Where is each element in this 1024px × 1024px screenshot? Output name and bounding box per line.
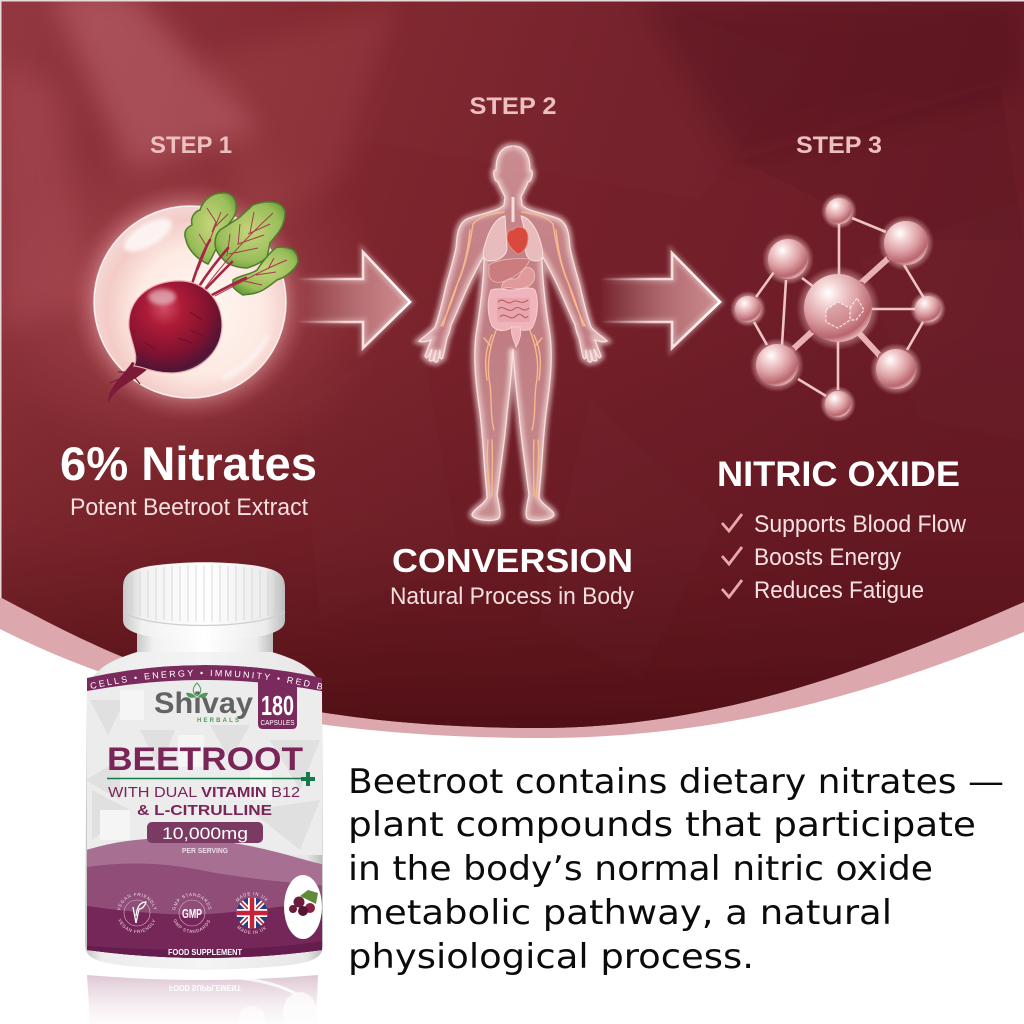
dosage pill: 10,000mg (162, 824, 248, 843)
description paragraph (348, 762, 1004, 977)
benefit: supports blood flow: Supports Blood Flow (754, 511, 967, 538)
benefits checklist (722, 511, 967, 604)
stems (192, 240, 246, 297)
label wave: mid (87, 864, 322, 958)
text: 6% Nitrates heading: 6% Nitrates (60, 437, 317, 490)
leaf: front right (215, 247, 298, 296)
bottle reflection (87, 975, 318, 1024)
bottle neck (137, 628, 273, 660)
bottle reflection: FOOD SUPPLEMENT (169, 983, 241, 992)
liver (489, 259, 530, 282)
benefit: boosts energy: Boosts Energy (754, 544, 901, 571)
stomach (502, 268, 535, 290)
leaf: middle (205, 202, 285, 288)
step 1 label: STEP 1 (150, 132, 232, 159)
text: NITRIC OXIDE heading: NITRIC OXIDE (717, 455, 960, 494)
GMP badge: GMP STANDARDS (172, 892, 212, 910)
icon: nitric oxide molecule (730, 193, 946, 422)
band text: D CELLS • ENERGY • IMMUNITY • RED BL (90, 670, 322, 690)
ingredients: WITH DUAL VITAMIN B12 (108, 784, 300, 801)
arrow: step 2 to step 3 (600, 253, 720, 348)
description paragraph: in the body’s normal nitric oxide (348, 849, 933, 889)
label background pattern (82, 680, 327, 855)
bottle cap (123, 562, 285, 640)
UK badge: MADE IN UK (237, 926, 266, 934)
vegan badge: VEGAN FRIENDLY (118, 918, 156, 934)
windpipe (512, 197, 514, 222)
icon: beetroot in bubble (70, 182, 310, 422)
beet root (108, 281, 222, 403)
background panel with curved bottom (0, 0, 1024, 738)
green rule and plus (107, 778, 302, 780)
leaf: back (185, 193, 236, 270)
food supplement: FOOD SUPPLEMENT (168, 948, 242, 957)
180 capsules badge (258, 680, 297, 729)
description paragraph: plant compounds that participate (348, 805, 976, 845)
label top band (82, 665, 326, 692)
GMP badge: GMP STANDARDS (174, 919, 210, 934)
GMP badge: GMP (182, 906, 202, 921)
dosage pill (147, 822, 263, 843)
label wave: light (87, 838, 322, 958)
description paragraph: Beetroot contains dietary nitrates — (348, 762, 1004, 802)
description paragraph: metabolic pathway, a natural (348, 893, 892, 933)
benefit: reduces fatigue: Reduces Fatigue (754, 577, 924, 604)
intestines (488, 288, 537, 347)
bottle body (85, 652, 323, 970)
brand logo: HERBALS (197, 718, 239, 724)
step 2 label: STEP 2 (470, 93, 556, 120)
180 capsules badge: 180 (261, 690, 294, 721)
heart (507, 227, 528, 254)
step 3 label: STEP 3 (796, 132, 882, 159)
per serving: PER SERVING (182, 848, 229, 855)
vegan badge (117, 892, 157, 934)
icon: human body with organs (419, 146, 607, 520)
UK badge (236, 892, 268, 934)
lungs (483, 216, 543, 261)
description paragraph: physiological process. (348, 937, 754, 977)
arrow: step 1 to step 2 (297, 252, 410, 348)
text: Potent Beetroot Extract: Potent Beetroot Extract (70, 494, 308, 521)
GMP badge (172, 892, 212, 934)
text: Natural Process in Body: Natural Process in Body (390, 583, 634, 610)
label wave: dark (87, 900, 322, 958)
product name: BEETROOT (107, 741, 303, 777)
vegan badge: VEGAN FRIENDLY (117, 892, 157, 910)
beet photo badge (284, 875, 322, 939)
brand logo: Shivay (154, 687, 253, 720)
180 capsules badge: CAPSULES (260, 720, 295, 727)
UK badge: MADE IN UK (236, 892, 268, 902)
ingredients: & L-CITRULLINE (137, 802, 272, 819)
ingredients (108, 784, 300, 819)
text: CONVERSION heading: CONVERSION (392, 542, 633, 579)
product bottle (85, 562, 323, 970)
